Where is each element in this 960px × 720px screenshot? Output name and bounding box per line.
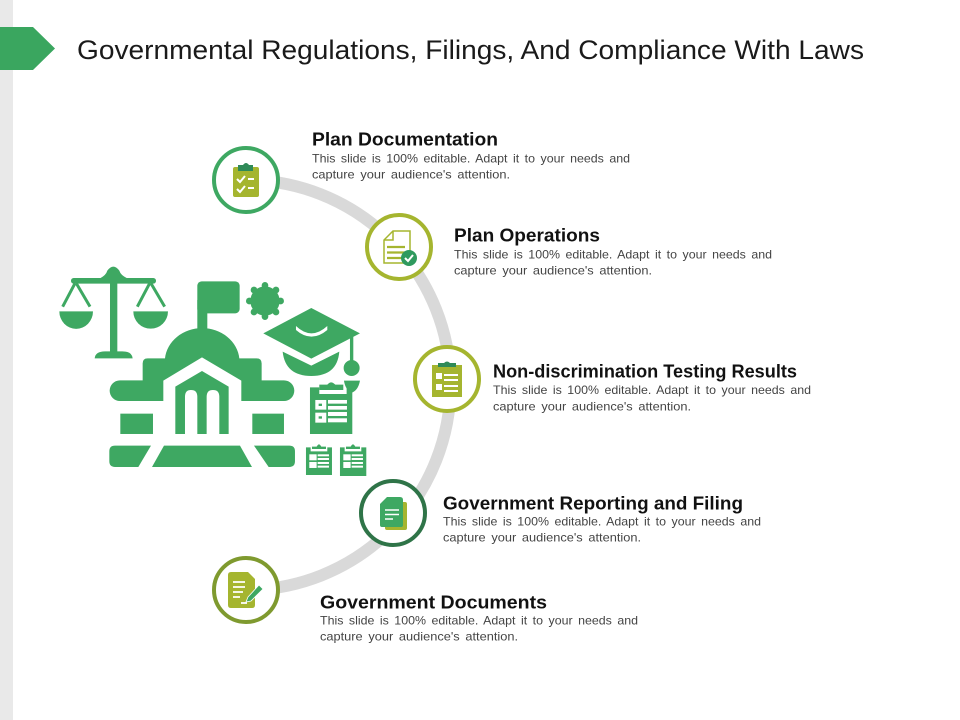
item 2 text: Plan Operations [454, 226, 600, 246]
item 4 text: capture your audience's attention. [443, 530, 641, 544]
item 3: non-discrimination testing node [415, 347, 479, 411]
icon: scales of justice [59, 267, 168, 358]
curved connector arc [245, 180, 451, 590]
item 1 text: capture your audience's attention. [312, 168, 510, 182]
item 4 text [443, 494, 761, 544]
header arrow tag [0, 27, 55, 70]
item 1 text: Plan Documentation [312, 130, 498, 150]
icon: building [109, 328, 295, 467]
icon: graduation cap [263, 308, 360, 393]
item 5 text: This slide is 100% editable. Adapt it to your needs and [320, 614, 638, 628]
item 5: government documents node [214, 558, 278, 622]
central icon: government building, scales, cap and clipboards [59, 267, 366, 476]
icon: approved document [384, 231, 417, 266]
item 5 text: Government Documents [320, 592, 547, 612]
item 3 text: This slide is 100% editable. Adapt it to your needs and [493, 383, 811, 397]
item 3 text: capture your audience's attention. [493, 400, 691, 414]
item 2 text: This slide is 100% editable. Adapt it to your needs and [454, 248, 772, 262]
title: Governmental Regulations, Filings, And Compliance With Laws [77, 35, 864, 65]
item 1 text [312, 130, 630, 182]
item 4 text: Government Reporting and Filing [443, 494, 743, 514]
item 5 text [320, 592, 638, 644]
item 5 text: capture your audience's attention. [320, 630, 518, 644]
item 3 text [493, 362, 811, 414]
item 3 text: Non-discrimination Testing Results [493, 362, 797, 382]
item 1: plan documentation node [214, 148, 278, 212]
icon: small clipboard right [340, 444, 366, 476]
icon: large clipboard [310, 382, 352, 434]
icon: document with pen [228, 572, 263, 608]
icon: gear [246, 282, 284, 320]
icon: checklist clipboard [233, 163, 259, 197]
icon: small clipboard left [306, 444, 332, 475]
item 4 text: This slide is 100% editable. Adapt it to your needs and [443, 514, 761, 528]
item 2 text [454, 226, 772, 278]
icon: list clipboard [432, 362, 462, 397]
item 4: government reporting node [361, 481, 425, 545]
icon: flag [197, 281, 240, 330]
item 2: plan operations node [367, 215, 431, 279]
icon: stacked documents [380, 497, 407, 530]
item 1 text: This slide is 100% editable. Adapt it to your needs and [312, 152, 630, 166]
item 2 text: capture your audience's attention. [454, 264, 652, 278]
